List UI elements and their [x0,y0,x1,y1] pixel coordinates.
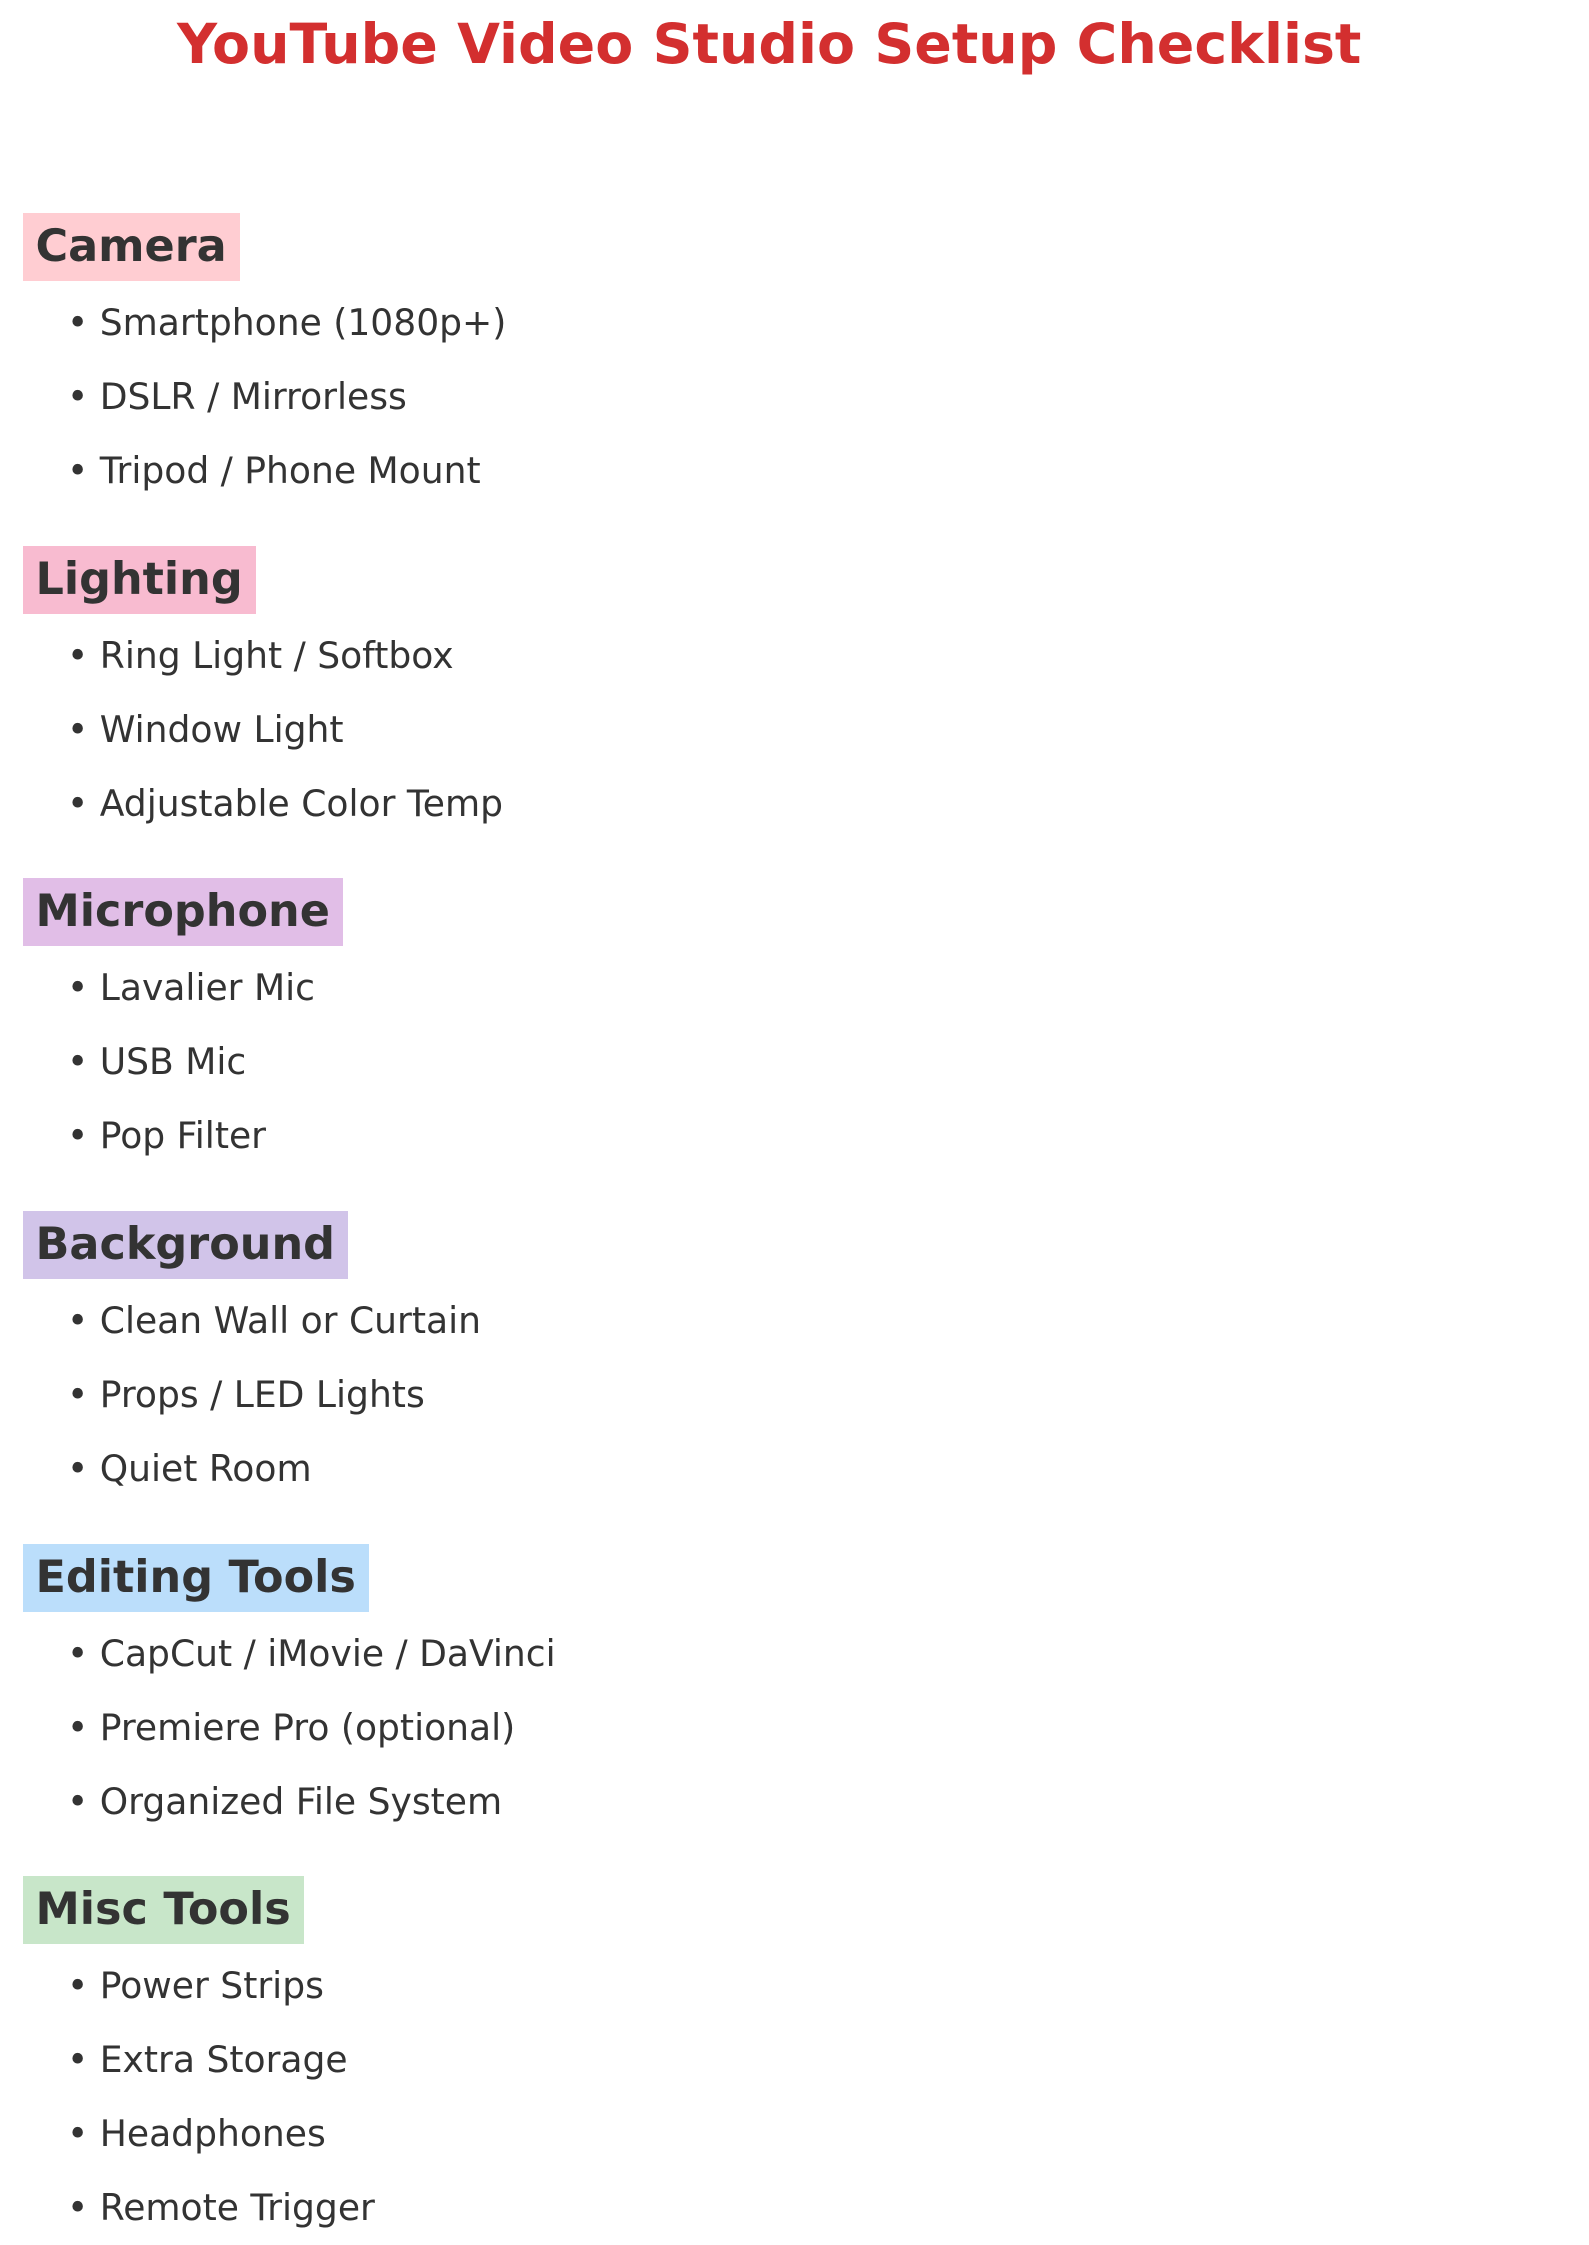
panel: camera [23,213,506,492]
item: props: • Props / LED Lights [67,1374,425,1416]
heading: misc tools [23,1876,304,1944]
heading: background [23,1211,348,1279]
item: headphones: • Headphones [67,2113,326,2155]
item: smartphone: • Smartphone (1080p+) [67,302,506,344]
heading: camera [23,213,240,281]
item: dslr: • DSLR / Mirrorless [67,376,407,418]
panel: editing tools [23,1544,556,1823]
item: lavalier: • Lavalier Mic [67,967,315,1009]
item: pop filter: • Pop Filter [67,1115,266,1157]
item: capcut: • CapCut / iMovie / DaVinci [67,1633,556,1675]
item: color temp: • Adjustable Color Temp [67,783,503,825]
heading: editing tools [23,1544,369,1612]
heading: microphone: Microphone [36,886,330,937]
heading: misc tools: Misc Tools [36,1884,291,1935]
panel: background [23,1211,481,1490]
item: quiet room: • Quiet Room [67,1448,312,1490]
item: usb mic: • USB Mic [67,1041,246,1083]
heading: microphone [23,878,343,946]
item: window light: • Window Light [67,709,344,751]
heading: lighting [23,546,256,614]
item: clean wall: • Clean Wall or Curtain [67,1300,481,1342]
title: YouTube Video Studio Setup Checklist [177,12,1361,76]
heading: lighting: Lighting [36,554,243,605]
heading: editing tools: Editing Tools [36,1552,356,1603]
item: premiere: • Premiere Pro (optional) [67,1707,515,1749]
item: tripod: • Tripod / Phone Mount [67,450,481,492]
item: ring light: • Ring Light / Softbox [67,635,454,677]
item: file system: • Organized File System [67,1781,502,1823]
item: remote trigger: • Remote Trigger [67,2187,375,2229]
item: power strips: • Power Strips [67,1965,324,2007]
panel: misc tools [23,1876,375,2229]
item: extra storage: • Extra Storage [67,2039,348,2081]
heading: camera: Camera [36,221,227,272]
panel: lighting [23,546,503,825]
heading: background: Background [36,1219,335,1270]
panel: microphone [23,878,343,1157]
